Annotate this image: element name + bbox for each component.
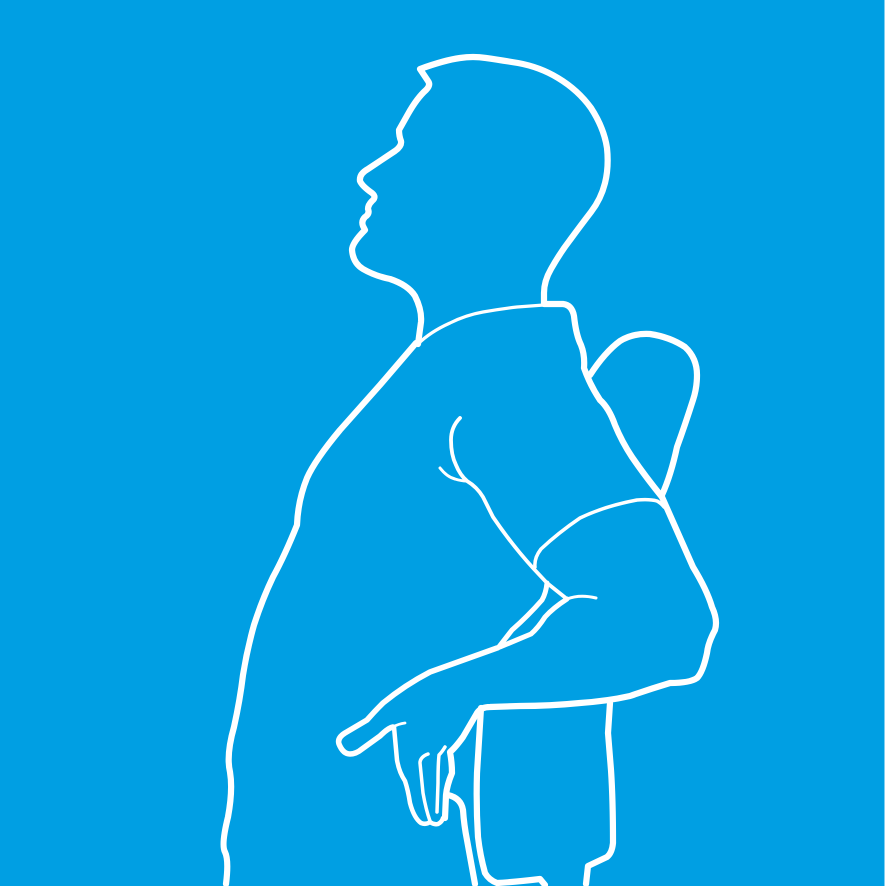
hand outer edge and fingers (394, 727, 443, 824)
collar and shoulder outline (544, 304, 662, 497)
head and neck outline (352, 57, 608, 344)
torso front outline (224, 343, 416, 884)
ring finger line (437, 747, 445, 812)
armpit crease (440, 468, 467, 481)
sleeve hem (535, 500, 664, 567)
inner forearm fold (500, 599, 567, 647)
collar seam (418, 305, 544, 344)
hand thumb tip (393, 723, 405, 727)
backpack outline (590, 334, 697, 495)
upper arm and forearm outline (445, 497, 716, 818)
thigh outline (448, 795, 475, 884)
armpit fold (451, 418, 567, 599)
shorts right edge and hem (586, 703, 613, 884)
elbow crease (567, 596, 596, 599)
inner elbow fold lines (498, 583, 547, 648)
forearm top and index finger outline (339, 648, 497, 754)
middle finger line (420, 754, 430, 821)
shorts left edge and hem (477, 708, 545, 885)
